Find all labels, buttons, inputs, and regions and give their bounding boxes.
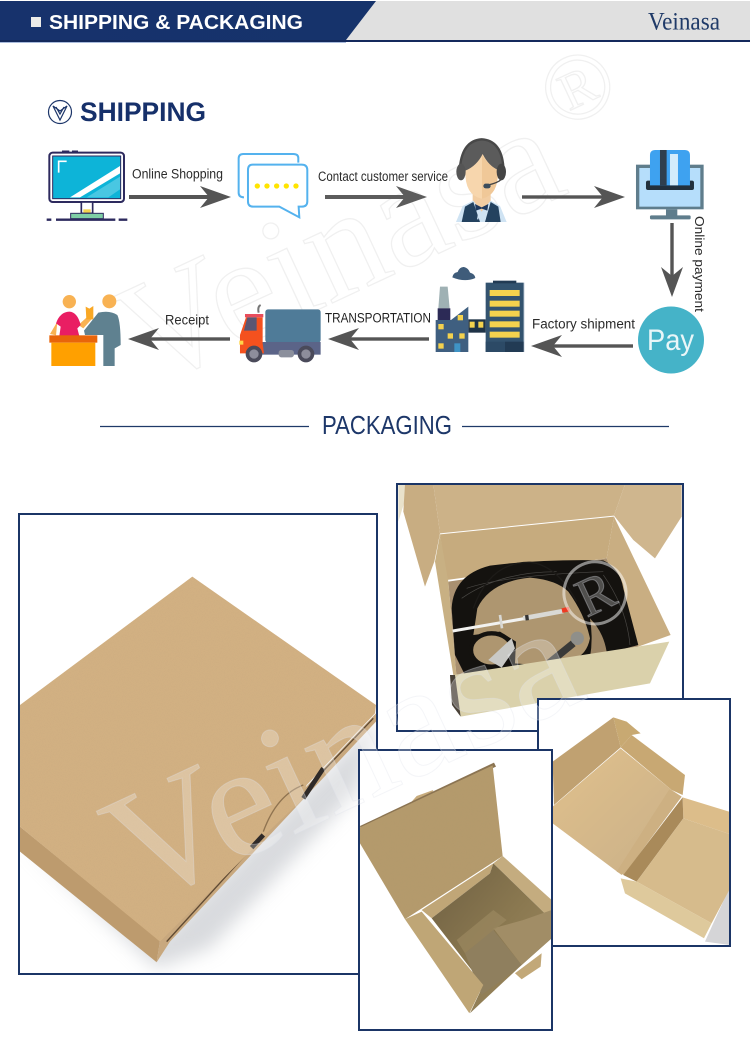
heading text: SHIPPING [80, 97, 206, 127]
label: Contact customer service: Contact customer service [318, 169, 448, 184]
label: Online payment: Online payment [692, 216, 707, 312]
header banner [0, 1, 750, 43]
brand name: Veinasa [648, 8, 720, 36]
header title: SHIPPING & PACKAGING [49, 11, 303, 34]
arrow: agent to payment [522, 186, 625, 208]
arrow: pay to factory [531, 335, 633, 357]
photo: open box with insert, bottom [359, 750, 552, 1030]
photo: closed kraft box [19, 514, 377, 974]
background watermark: Veinasa upper: R [550, 55, 606, 122]
foreground watermark: Veinasa over photos: R [566, 559, 624, 629]
icon: computer monitor [47, 152, 127, 220]
packaging title: PACKAGING [322, 410, 452, 440]
label: Online Shopping: Online Shopping [132, 166, 223, 182]
arrow: monitor to chat [129, 186, 231, 208]
icon: circled chevron [48, 100, 72, 124]
icon: Pay circle [638, 306, 704, 374]
arrow: truck to receipt [128, 328, 230, 350]
foreground watermark: Veinasa over photos: Veinasa [79, 567, 605, 939]
icon: delivery truck [239, 305, 321, 362]
icon: factory and office building [436, 267, 525, 352]
icon: people at counter [49, 294, 121, 366]
label: Factory shipment: Factory shipment [532, 316, 635, 332]
label: TRANSPORTATION: TRANSPORTATION [325, 310, 431, 326]
icon: chat bubbles [239, 154, 307, 217]
arrow: chat to agent [325, 186, 427, 208]
icon: customer service agent [456, 139, 507, 222]
icon: Pay circle: Pay [647, 324, 694, 357]
photo: open empty box, right [538, 699, 730, 946]
background watermark: Veinasa upper: Veinasa [92, 71, 585, 419]
label: Receipt: Receipt [165, 312, 209, 328]
arrow: factory to truck [328, 328, 429, 350]
icon: online payment monitor with card [636, 150, 704, 219]
shipping heading [48, 97, 206, 127]
photo: open box with cable and syringe [397, 484, 683, 731]
arrow: payment down to pay [661, 223, 683, 297]
header square bullet [31, 17, 41, 27]
